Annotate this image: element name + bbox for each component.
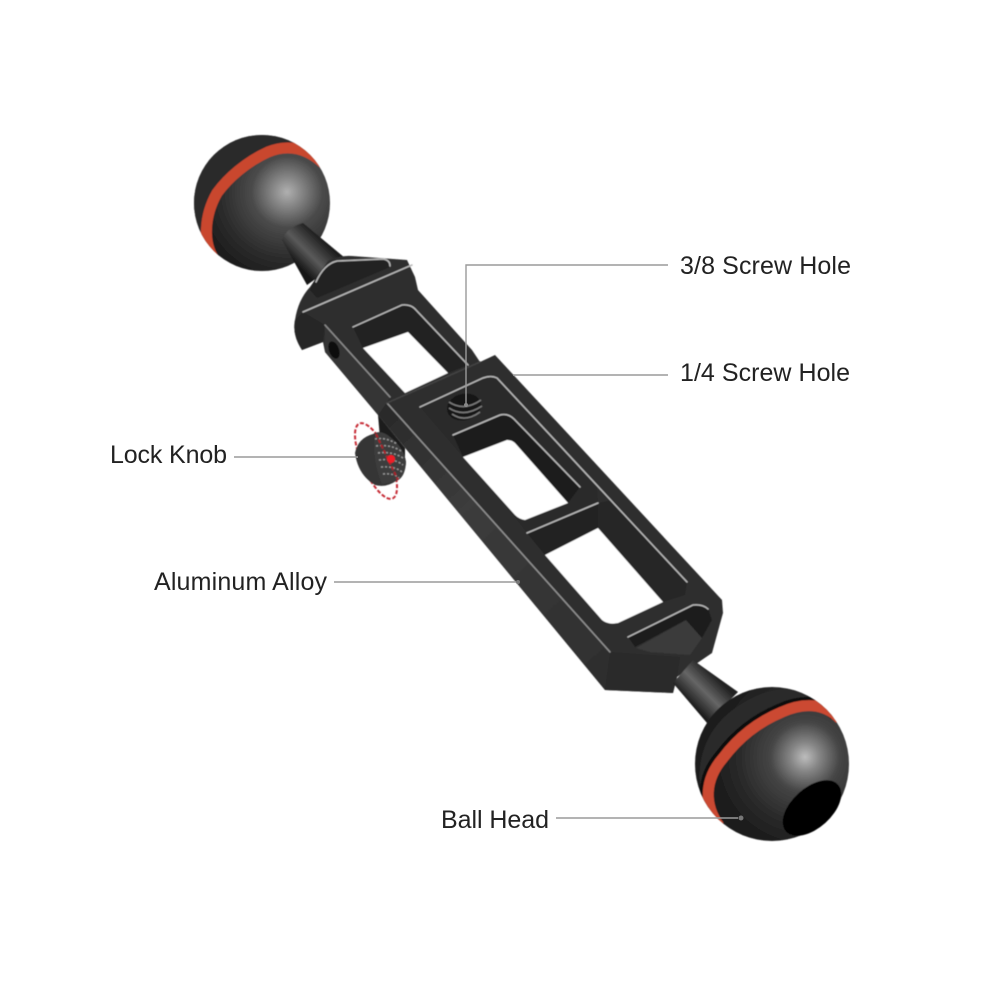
bottom ball red ring: [708, 706, 840, 826]
upper window: [363, 332, 448, 393]
label: Ball Head: [441, 806, 744, 834]
right rail recess: [598, 500, 687, 602]
top ball red ring: [206, 148, 324, 259]
label: 3/8 Screw Hole: [464, 252, 851, 407]
label: 1/4 Screw Hole: 1/4 Screw Hole: [680, 359, 850, 387]
bottom ball: [695, 687, 849, 841]
centre window recess: [453, 415, 580, 503]
lower window: [545, 528, 663, 624]
aluminum bracket: [294, 256, 738, 723]
label: Aluminum Alloy: Aluminum Alloy: [154, 568, 328, 596]
upper window recess: [353, 305, 468, 373]
label: Ball Head: Ball Head: [441, 806, 549, 834]
top ball: [194, 135, 330, 271]
end facet: [605, 652, 680, 693]
top ball head: [170, 110, 345, 285]
bottom ball head: [695, 687, 851, 846]
top slot: [310, 260, 390, 298]
red dashed rotation marker: [347, 418, 405, 504]
bottom neck: [673, 660, 738, 723]
lower side face: [378, 403, 610, 690]
infographic: ball head clamp with labelled parts: [112, 134, 850, 842]
knob stem: [378, 415, 405, 468]
plate recess floor: [420, 375, 598, 533]
bottom slot light ramp: [636, 620, 702, 655]
screw hole threads: [443, 389, 485, 425]
red axis line and dot: [376, 434, 398, 480]
bottom ball upper cap: [700, 688, 810, 784]
top ball upper cap: [194, 134, 304, 233]
head under-lip: [294, 312, 325, 350]
label: 3/8 Screw Hole: 3/8 Screw Hole: [680, 252, 851, 280]
bottom ball ring shadow: [706, 703, 836, 824]
centre window: [463, 440, 568, 520]
top neck: [282, 223, 345, 285]
bottom slot: [628, 605, 712, 647]
label: Aluminum Alloy: [154, 568, 520, 596]
bracket body: [294, 256, 723, 693]
side small hole: [326, 340, 342, 360]
product photo: [170, 110, 851, 846]
lock knob: [347, 415, 406, 504]
bottom ball hole: [773, 770, 851, 846]
label: Lock Knob: Lock Knob: [110, 441, 227, 469]
knob body silhouette: [355, 432, 406, 486]
upper side face near head: [325, 325, 390, 415]
knurled section: [374, 433, 406, 484]
lower crossbar shade: [527, 503, 598, 555]
edge highlights: [303, 259, 708, 652]
